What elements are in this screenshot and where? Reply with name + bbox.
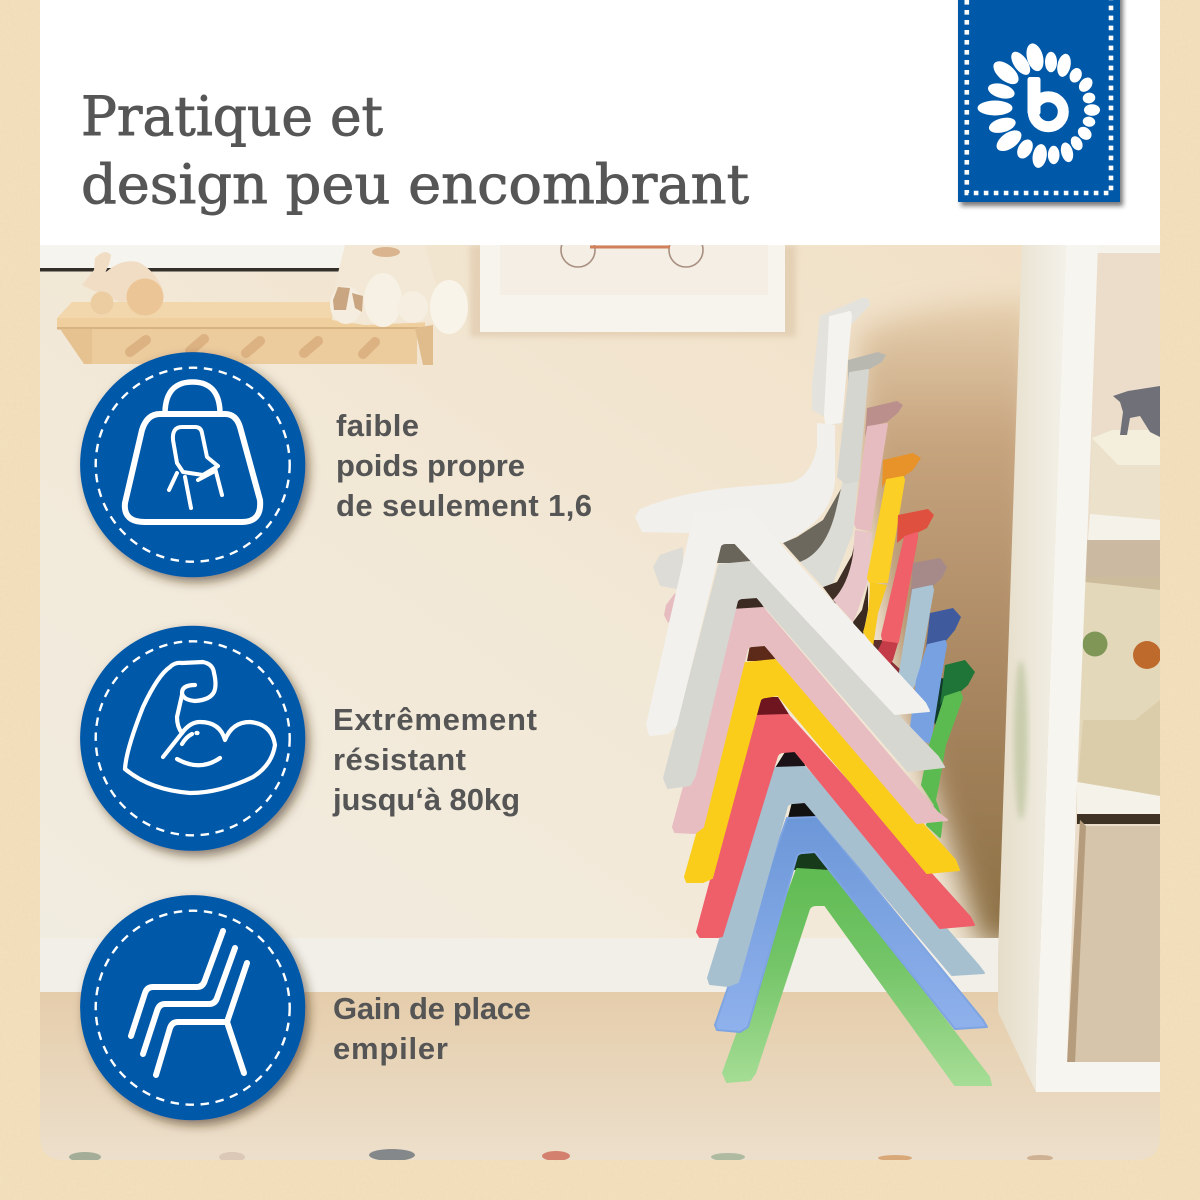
toy elephant — [1113, 386, 1160, 437]
green reflection — [1014, 660, 1028, 820]
chair legs: red — [697, 697, 974, 937]
badge: stackable — [80, 895, 305, 1120]
chair back: red — [878, 509, 934, 668]
chair legs: pink — [673, 597, 947, 833]
text: strength — [332, 702, 537, 817]
text: space saving: empiler — [333, 1031, 448, 1066]
title — [81, 85, 749, 216]
chair stack — [635, 298, 991, 1085]
baseboard — [40, 938, 1005, 994]
icon: flexed arm — [125, 662, 275, 793]
brand logo tag — [958, 0, 1120, 202]
chair back: light blue — [898, 558, 947, 692]
chair back: grey — [800, 352, 886, 587]
text: low weight: de seulement 1,6 — [336, 488, 592, 523]
icon: flower logo — [978, 42, 1100, 169]
icon: weight bag with chair — [125, 382, 260, 522]
title: design peu encombrant — [81, 153, 749, 216]
shelf front face — [1036, 245, 1160, 1092]
white header band — [40, 0, 1160, 245]
wooden shelf with pegs — [57, 302, 433, 365]
chair seats left edges — [653, 547, 683, 623]
text: strength: jusqu‘à 80kg — [332, 782, 520, 817]
chair legs: yellow — [685, 645, 959, 882]
text: strength: résistant — [333, 742, 466, 777]
dark gaps between chair backs — [783, 487, 958, 725]
wooden rabbit toy — [82, 252, 164, 316]
text: low weight: poids propre — [336, 448, 525, 483]
wall shadow behind chairs — [858, 300, 1035, 945]
title: Pratique et — [81, 85, 383, 148]
rug pompoms — [69, 1149, 1053, 1160]
interior wall — [1067, 253, 1160, 1056]
chair legs: green — [723, 838, 991, 1085]
lidded box — [1092, 430, 1160, 465]
chair legs: white — [647, 510, 929, 735]
frame with bicycle drawing — [470, 233, 796, 337]
icon: stacked chairs — [131, 931, 247, 1075]
woven basket — [1078, 577, 1161, 796]
plush toy — [330, 245, 468, 334]
chair back: green — [922, 660, 975, 837]
badge: strong — [80, 626, 305, 851]
chair legs: grey — [664, 542, 944, 788]
shelf side face — [998, 245, 1066, 1092]
text: low weight: faible — [336, 408, 419, 443]
chair back: white — [635, 298, 870, 543]
text: strength: Extrêmement — [333, 702, 537, 737]
floor — [40, 992, 1160, 1160]
photo: children's room scene — [40, 233, 1161, 1162]
chair legs: light blue — [708, 752, 984, 986]
shelf two — [1077, 782, 1160, 816]
badge: lightweight — [80, 352, 305, 577]
frame left — [40, 245, 345, 272]
fabric storage box — [1067, 820, 1160, 1064]
chair back: blue — [910, 608, 961, 743]
chair back: pink — [833, 401, 903, 622]
wall — [40, 245, 1040, 945]
chair legs: blue — [715, 790, 987, 1032]
shelf one — [1088, 514, 1160, 540]
text: low weight — [336, 408, 592, 523]
chair back: yellow — [863, 453, 921, 647]
shelving unit — [998, 245, 1161, 1092]
text: space saving: Gain de place — [333, 991, 531, 1026]
text: space saving — [333, 991, 531, 1066]
